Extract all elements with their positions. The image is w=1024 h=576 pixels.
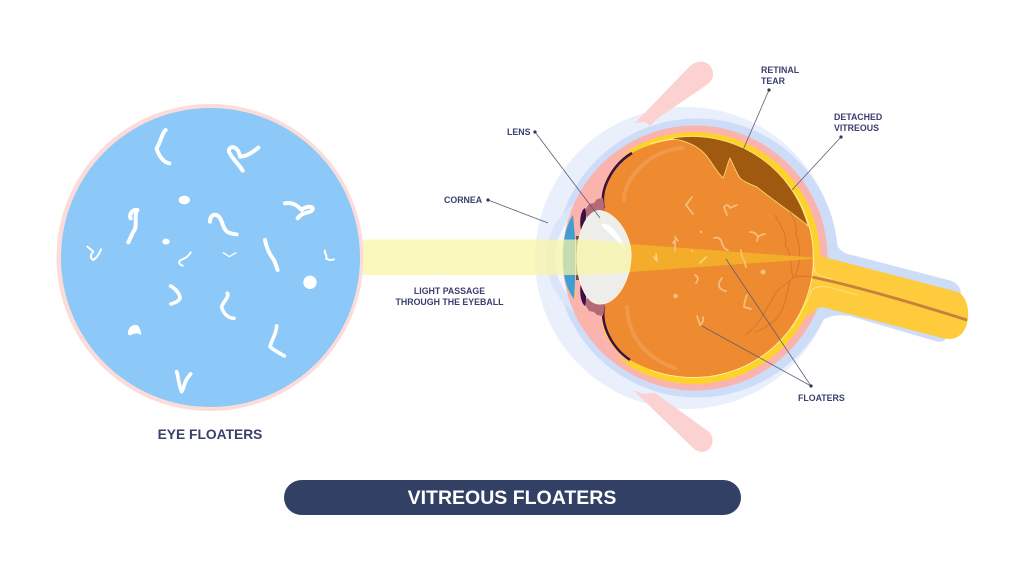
light beam inside vitreous xyxy=(630,244,813,272)
retinal blood vessels xyxy=(745,212,812,335)
eye floaters view circle xyxy=(56,104,364,411)
floaters inside eye xyxy=(654,197,766,325)
sclera xyxy=(562,126,828,390)
optic nerve sheath xyxy=(805,190,961,342)
eye muscle: bottom xyxy=(633,390,712,452)
ciliary body top xyxy=(584,198,605,222)
floater shapes xyxy=(87,130,334,392)
leader lines xyxy=(488,90,841,386)
eye floaters caption: EYE FLOATERS xyxy=(158,427,262,442)
iris xyxy=(563,215,575,299)
choroid dark edge bottom xyxy=(603,306,630,360)
eyeball anatomy xyxy=(535,62,968,452)
lens xyxy=(577,210,631,304)
choroid dark edge top xyxy=(603,153,632,208)
central nerve vessel xyxy=(812,277,967,320)
iris dark bottom xyxy=(580,281,586,306)
label: retinal tear: TEAR xyxy=(761,76,786,86)
blue layer and cornea bulge xyxy=(546,118,961,398)
title banner xyxy=(284,480,741,515)
outer pale layer xyxy=(535,107,837,409)
retina layer xyxy=(568,132,820,384)
vitreous highlights xyxy=(624,148,682,368)
nerve head light lines xyxy=(792,250,858,328)
leader dots xyxy=(486,88,843,388)
ciliary body bottom xyxy=(584,294,605,316)
label: light passage: LIGHT PASSAGE xyxy=(414,286,485,296)
optic nerve xyxy=(808,250,968,339)
label: floaters: FLOATERS xyxy=(798,393,845,403)
eye muscle: top xyxy=(635,62,713,126)
title banner: VITREOUS FLOATERS xyxy=(408,487,616,509)
light beam through the eye xyxy=(363,240,630,275)
detached vitreous xyxy=(670,136,808,226)
label: retinal tear: RETINAL xyxy=(761,65,800,75)
front chamber pink fill xyxy=(573,149,634,364)
label: light passage: THROUGH THE EYEBALL xyxy=(395,297,504,307)
label: lens: LENS xyxy=(507,127,531,137)
retina inner light line xyxy=(650,138,813,378)
iris dark top xyxy=(580,208,586,232)
label: detached vitreous: DETACHED xyxy=(834,112,882,122)
label: detached vitreous: VITREOUS xyxy=(834,123,879,133)
vitreous body xyxy=(603,138,813,378)
label: cornea: CORNEA xyxy=(444,195,483,205)
